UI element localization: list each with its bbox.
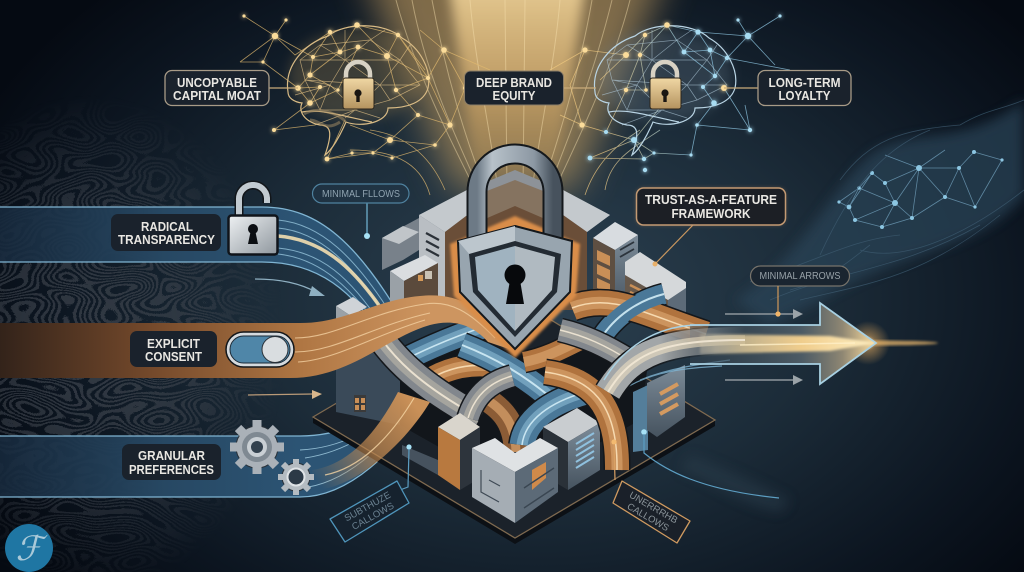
label: uncopyable capital moat: CAPITAL MOAT xyxy=(173,88,261,103)
output arrow xyxy=(604,303,938,392)
brain network: right gold to blue xyxy=(550,14,790,195)
base platform xyxy=(313,298,715,544)
wisp: orange strand from preferences xyxy=(312,392,430,490)
flow: granular preferences stream xyxy=(0,398,425,497)
label: deep brand equity: DEEP BRAND xyxy=(476,75,552,90)
icon: small gear xyxy=(278,459,314,495)
callout: subthuze callows xyxy=(330,444,412,542)
label: uncopyable capital moat: UNCOPYABLE xyxy=(177,75,257,90)
small gold lock left xyxy=(343,62,374,109)
label: granular preferences: PREFERENCES xyxy=(129,462,214,477)
icon: consent toggle xyxy=(226,332,294,367)
label: explicit consent: CONSENT xyxy=(145,349,202,364)
callout: trust-as-a-feature framework: TRUST-AS-A-FEATURE xyxy=(645,192,777,207)
logo badge: ℱ xyxy=(16,531,49,568)
small arrows on left xyxy=(248,279,325,399)
woven ribbons: orange arc xyxy=(545,372,617,470)
woven ribbons: front layer xyxy=(468,376,586,452)
flow: radical transparency stream xyxy=(0,207,404,338)
bottom smoky waves xyxy=(680,455,790,512)
label: long-term loyalty xyxy=(758,70,851,106)
label: radical transparency xyxy=(111,214,221,251)
callout: unerrrhb callows: CALLOWS xyxy=(625,501,671,534)
label: long-term loyalty: LOYALTY xyxy=(778,88,831,103)
logo badge xyxy=(5,524,53,572)
callout: minimal flows xyxy=(312,184,409,203)
callout: trust-as-a-feature framework: FRAMEWORK xyxy=(672,206,751,221)
callout: subthuze callows: CALLOWS xyxy=(350,501,396,533)
fingerprint pattern xyxy=(0,130,248,564)
icon: open padlock xyxy=(228,185,278,254)
central padlock with shield xyxy=(450,154,580,358)
label: granular preferences xyxy=(122,444,221,480)
label: granular preferences: GRANULAR xyxy=(138,448,206,463)
woven ribbons: back layer xyxy=(372,294,706,418)
label: radical transparency: TRANSPARENCY xyxy=(118,232,215,247)
callout line: minimal flows xyxy=(364,203,370,239)
right data mesh xyxy=(735,100,1024,325)
small gold lock right xyxy=(650,62,681,109)
connector lines for top labels xyxy=(269,87,758,89)
label: deep brand equity xyxy=(464,71,564,105)
label: radical transparency: RADICAL xyxy=(141,219,193,234)
brain network: left gold xyxy=(240,14,490,195)
callout: unerrrhb callows: UNERRRHB xyxy=(627,490,679,526)
small arrows near output xyxy=(725,286,803,385)
callout: minimal flows: MINIMAL FLLOWS xyxy=(322,188,400,200)
callout: minimal arrows: MINIMAL ARROWS xyxy=(760,270,840,282)
icon: large gear xyxy=(230,420,284,474)
label: uncopyable capital moat xyxy=(165,70,269,106)
callout: unerrrhb callows xyxy=(611,439,690,543)
label: explicit consent: EXPLICIT xyxy=(147,336,200,351)
label: deep brand equity: EQUITY xyxy=(492,88,536,103)
label: long-term loyalty: LONG-TERM xyxy=(768,75,840,90)
back buildings xyxy=(336,170,686,490)
callout: minimal arrows xyxy=(750,266,850,286)
callout: trust-as-a-feature framework xyxy=(636,188,786,266)
flow: explicit consent stream xyxy=(0,295,518,378)
blue callout trace bottom right xyxy=(641,429,779,498)
label: explicit consent xyxy=(130,331,217,367)
top centre light beams xyxy=(350,0,680,200)
callout: subthuze callows: SUBTHUZE xyxy=(343,490,393,524)
front storage blocks xyxy=(402,365,685,523)
